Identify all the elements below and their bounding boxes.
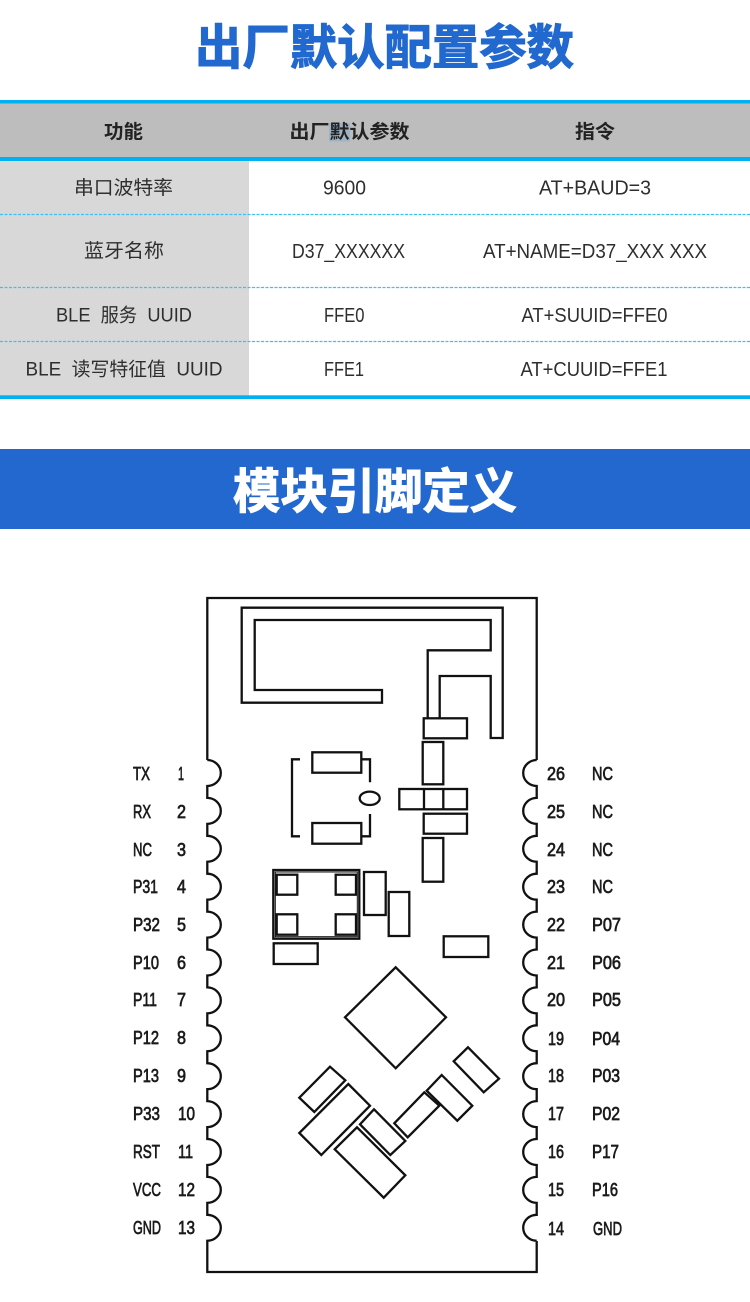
right pin labels: 20 (547, 990, 565, 1010)
left pin labels: P13 (133, 1066, 159, 1086)
left pin labels: GND (133, 1218, 161, 1238)
right pin labels: 19 (548, 1029, 564, 1049)
right pin labels: NC (592, 840, 613, 860)
left pin labels: 13 (178, 1218, 195, 1238)
left pin labels: 10 (178, 1104, 195, 1124)
antenna trace (242, 608, 503, 738)
right pin labels: P06 (592, 953, 621, 973)
left pin labels: TX (133, 764, 150, 784)
module outline with castellated edges (207, 598, 537, 1272)
rotated passive components (299, 1047, 499, 1198)
left pin labels: 4 (177, 877, 186, 897)
main chip diamond (345, 967, 446, 1068)
right pin labels: P05 (592, 990, 621, 1010)
left pin labels: 6 (177, 953, 186, 973)
left pin labels: P33 (133, 1104, 160, 1124)
table header row (104, 120, 615, 143)
table row: bluetooth name (84, 240, 707, 263)
right pin labels: P07 (592, 915, 621, 935)
right pin labels: P02 (592, 1104, 620, 1124)
right pin labels: 23 (547, 877, 565, 897)
right pin labels: 14 (548, 1219, 564, 1239)
left pin labels: P32 (133, 915, 160, 935)
right pin labels (547, 764, 622, 1239)
table header row: 出厂默认参数 (290, 120, 410, 143)
table row: baud rate (74, 176, 651, 200)
table row: BLE characteristic UUID: FFE1 (324, 358, 364, 381)
table row: baud rate: 串口波特率 (74, 177, 173, 199)
left pin labels: 3 (177, 840, 186, 860)
table row: BLE characteristic UUID: AT+CUUID=FFE1 (520, 358, 668, 381)
left pin labels: 2 (177, 802, 186, 822)
right pin labels: 24 (547, 840, 565, 860)
left pin labels: 11 (178, 1142, 193, 1162)
left pin labels: 8 (177, 1028, 186, 1048)
right pin labels: NC (592, 764, 613, 784)
right pin labels: 26 (547, 764, 565, 784)
table header row: 指令 (575, 120, 615, 143)
left pin labels: P31 (133, 877, 158, 897)
diagram: module outline and components (207, 598, 537, 1272)
left pin labels: P11 (133, 990, 157, 1010)
crystal package with pads (273, 870, 359, 939)
left pin labels: 5 (177, 915, 186, 935)
panel: parameter table (0, 100, 750, 399)
table row: bluetooth name: 蓝牙名称 (84, 240, 164, 262)
table row: BLE service UUID (56, 304, 668, 327)
table row: bluetooth name: D37_XXXXXX (292, 240, 405, 263)
left pin labels: 12 (178, 1180, 195, 1200)
right pin labels: GND (593, 1219, 622, 1239)
right pin labels: NC (592, 877, 613, 897)
right pin labels: 16 (548, 1142, 564, 1162)
right pin labels: NC (592, 802, 613, 822)
right pin labels: 21 (547, 953, 565, 973)
table row: baud rate: 9600 (323, 176, 366, 200)
right pin labels: P16 (592, 1180, 618, 1200)
left pin labels: RX (133, 802, 151, 822)
table row: baud rate: AT+BAUD=3 (539, 176, 651, 200)
left pin labels: P12 (133, 1028, 159, 1048)
left pin labels: 1 (178, 764, 184, 784)
right pin labels: 15 (548, 1180, 564, 1200)
left pin labels (133, 764, 195, 1238)
left pin labels: 7 (177, 990, 186, 1010)
right pin labels: P04 (592, 1029, 620, 1049)
title: factory default configuration: 出厂默认配置参数 (195, 22, 574, 75)
middle passive components (274, 872, 488, 964)
table row: BLE service UUID: BLE 服务 UUID (56, 304, 192, 326)
right pin labels: 18 (548, 1066, 564, 1086)
left pin labels: 9 (177, 1066, 186, 1086)
section banner: module pin definition: 模块引脚定义 (233, 466, 517, 519)
right pin labels: 17 (548, 1104, 564, 1124)
right pin labels: P03 (592, 1066, 620, 1086)
left pin labels: P10 (133, 953, 159, 973)
table header row: 功能 (104, 121, 143, 143)
right pin labels: P17 (592, 1142, 619, 1162)
table row: bluetooth name: AT+NAME=D37_XXX XXX (483, 240, 707, 263)
table row: BLE service UUID: AT+SUUID=FFE0 (522, 304, 668, 327)
section banner: module pin definition (0, 449, 750, 529)
left pin labels: RST (133, 1142, 160, 1162)
left pin labels: NC (133, 840, 152, 860)
table row: BLE characteristic UUID (26, 358, 668, 381)
left pin labels: VCC (133, 1180, 161, 1200)
upper components (292, 718, 467, 882)
table row: BLE service UUID: FFE0 (324, 304, 364, 327)
right pin labels: 25 (547, 802, 565, 822)
right pin labels: 22 (547, 915, 565, 935)
table row: BLE characteristic UUID: BLE 读写特征值 UUID (26, 358, 222, 380)
